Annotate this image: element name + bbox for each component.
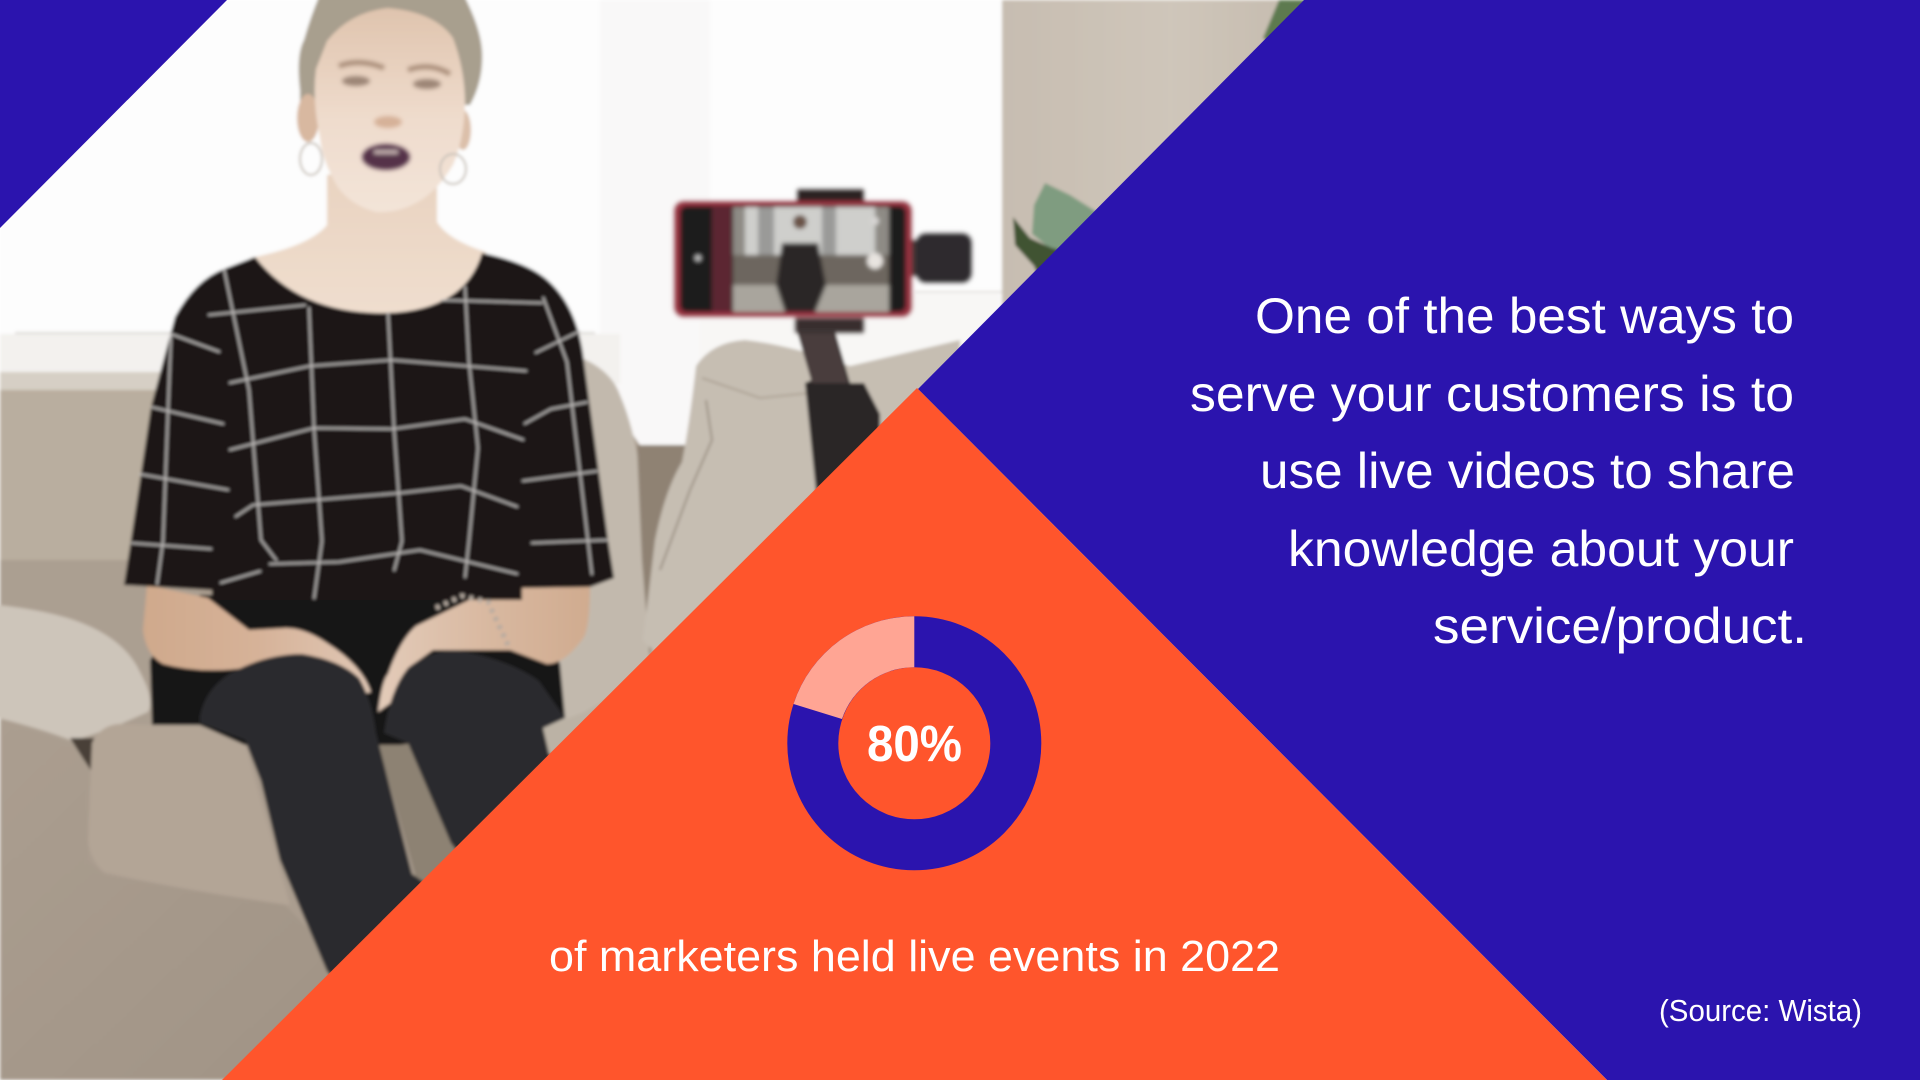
shirt (124, 253, 614, 600)
photo: woman filming herself on a sofa (0, 0, 1340, 1080)
donut value label: 80% (867, 715, 962, 772)
shape: orange triangle panel (222, 388, 1607, 1080)
waist and thighs dark (150, 595, 565, 745)
woman (124, 0, 614, 1010)
face (315, 8, 465, 212)
sheer curtain (600, 0, 710, 450)
neck and chest (250, 160, 500, 330)
caption: marketers statistic: of marketers held live events in 2022 (549, 932, 1280, 981)
ears (297, 94, 319, 142)
shape: right blue panel (918, 0, 1920, 1080)
sofa front cushion (88, 724, 290, 905)
phone on gimbal (674, 189, 972, 333)
gimbal handle (797, 331, 880, 530)
cushion beside right knee (543, 680, 640, 780)
shirt grid lines (131, 269, 608, 599)
text block: main message (1190, 288, 1807, 654)
sofa lower body (0, 720, 380, 1080)
sofa back left (0, 372, 200, 780)
seat between legs (378, 743, 480, 900)
chart segment: remaining 20% (794, 616, 914, 719)
left pillow (0, 604, 150, 741)
sofa seat dark back (637, 445, 690, 660)
pillow right (643, 340, 960, 690)
text block: main message: use live videos to share (1260, 443, 1795, 499)
shape: top-left blue corner triangle (0, 0, 227, 228)
sofa crease (70, 738, 94, 772)
text block: main message: service/product. (1433, 598, 1807, 654)
text block: main message: One of the best ways to (1255, 288, 1794, 344)
earrings (300, 143, 466, 184)
plant leaves (1013, 0, 1320, 280)
facial features (339, 62, 450, 170)
right leg (384, 650, 590, 880)
left leg (200, 654, 450, 1010)
donut chart: 80% (794, 616, 1016, 845)
sofa base fill (0, 388, 800, 1080)
arms and hands (143, 583, 590, 712)
sofa back right (500, 340, 660, 760)
text block: main message: serve your customers is to (1190, 366, 1794, 422)
curtain right (1002, 0, 1340, 340)
window sill (0, 291, 1005, 384)
hair (299, 0, 482, 105)
window background (0, 0, 1320, 1080)
source note: (Source: Wista) (1659, 993, 1862, 1028)
text block: main message: knowledge about your (1288, 521, 1794, 577)
bracelet (436, 596, 508, 645)
